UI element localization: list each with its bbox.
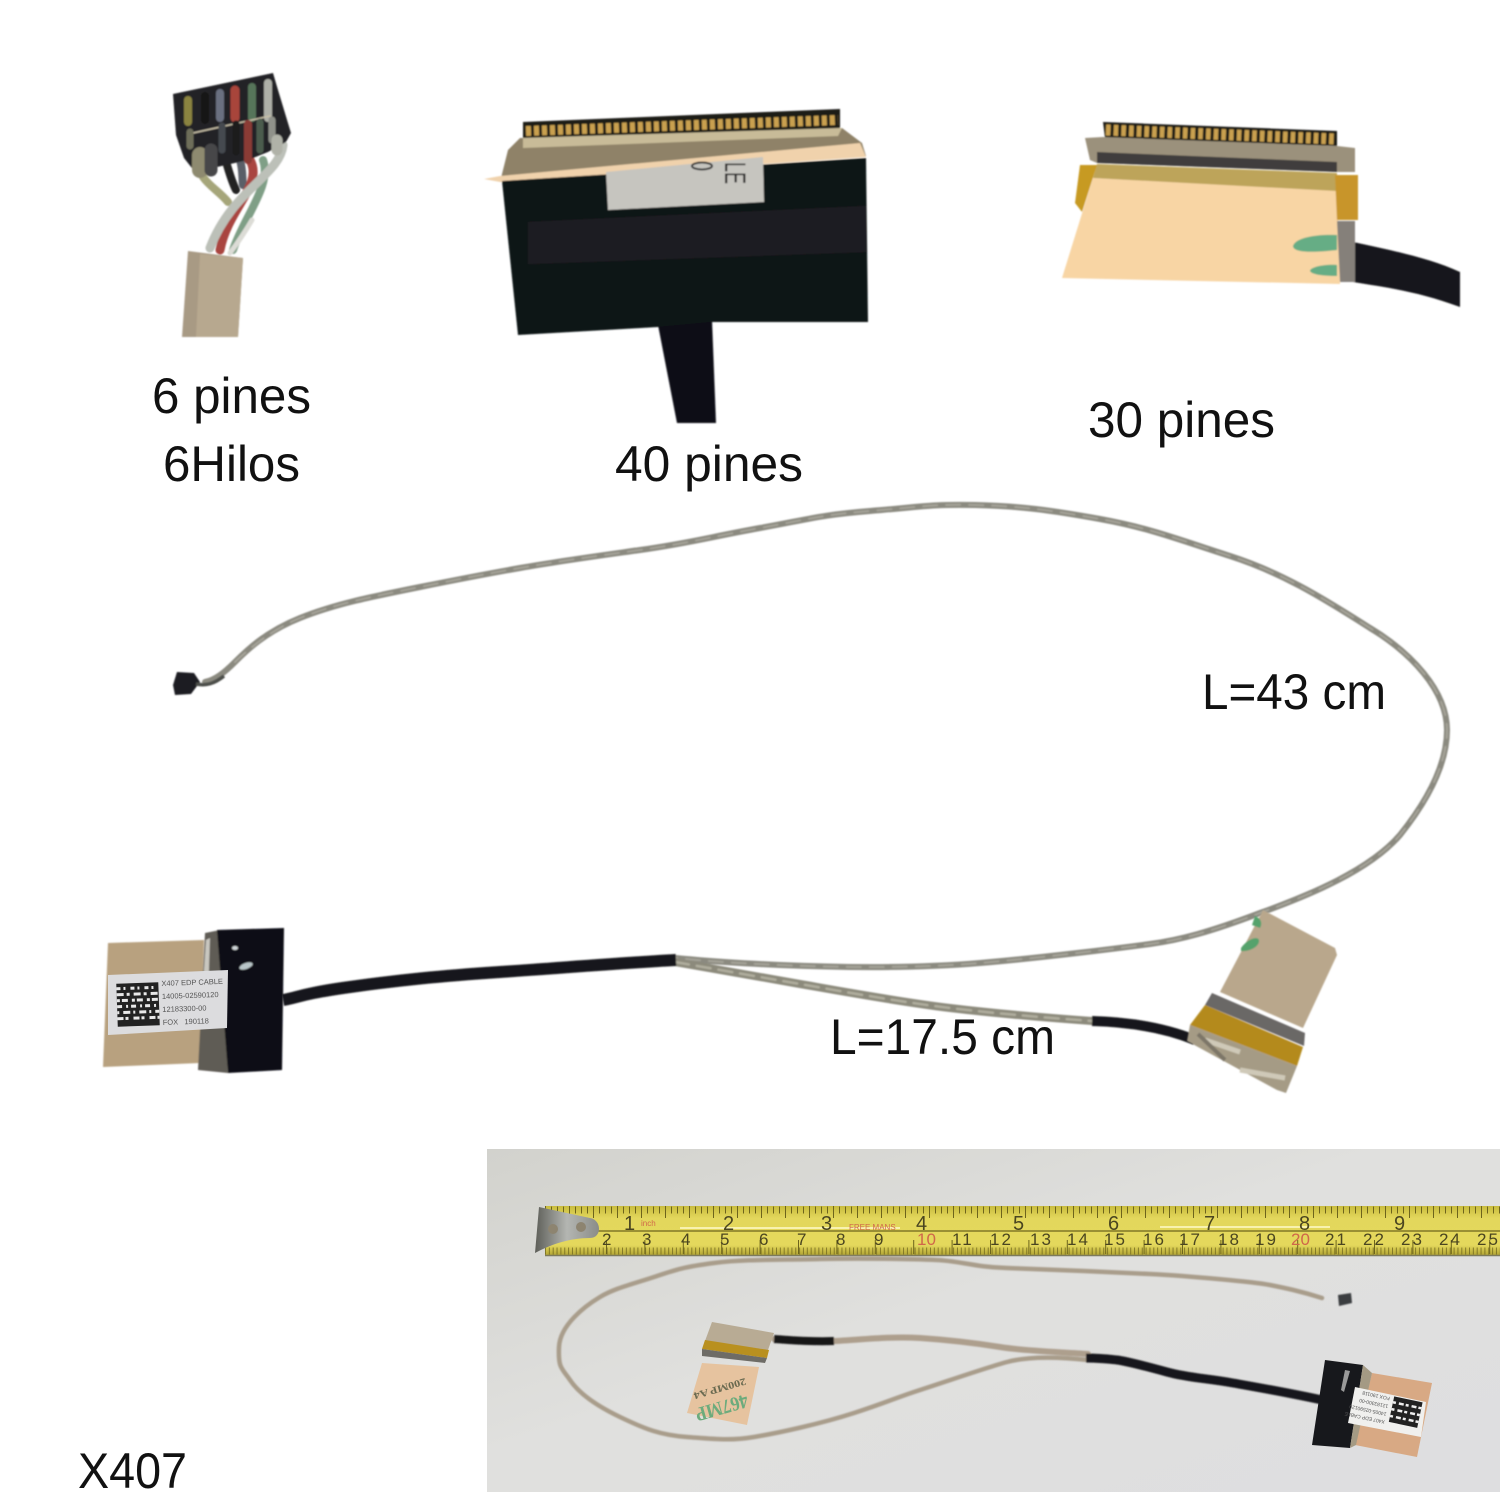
centimetre numbers: 15 bbox=[1104, 1230, 1127, 1249]
right connector bbox=[1187, 910, 1337, 1093]
centimetre numbers: 8 bbox=[836, 1230, 845, 1249]
photo background bbox=[487, 1149, 1500, 1492]
braided sleeve bbox=[182, 251, 243, 337]
photo: 30-pin connector bbox=[1062, 122, 1460, 307]
black cable bbox=[1353, 242, 1460, 307]
mesh bbox=[1337, 221, 1355, 282]
label: 30 pines: 30 pines bbox=[1088, 392, 1275, 448]
centimetre numbers bbox=[602, 1230, 1500, 1249]
tiny connector on tape photo bbox=[1338, 1293, 1352, 1306]
sticker text: 14005-02590120 bbox=[162, 990, 219, 1001]
centimetre numbers: 4 bbox=[681, 1230, 690, 1249]
model label: X407: X407 bbox=[78, 1443, 187, 1499]
white sticker bbox=[606, 157, 764, 210]
centimetre numbers: 21 bbox=[1325, 1230, 1348, 1249]
centimetre numbers: 19 bbox=[1255, 1230, 1278, 1249]
centimetre numbers: 25 bbox=[1477, 1230, 1500, 1249]
QR code bbox=[1389, 1396, 1423, 1428]
pin strip bbox=[523, 109, 840, 139]
metal shell bbox=[1085, 137, 1355, 172]
inch numbers: 2 bbox=[723, 1213, 734, 1235]
pins bbox=[1103, 122, 1337, 146]
inch numbers: 8 bbox=[1299, 1213, 1310, 1235]
centimetre numbers: 23 bbox=[1401, 1230, 1424, 1249]
centimetre numbers: 22 bbox=[1363, 1230, 1386, 1249]
inch numbers: 1 bbox=[624, 1213, 635, 1235]
long cable bbox=[205, 505, 1447, 1040]
centimetre numbers: 5 bbox=[720, 1230, 729, 1249]
tape brand name: FREE MANS bbox=[849, 1223, 896, 1232]
centimetre numbers: 2 bbox=[602, 1230, 611, 1249]
centimetre numbers: 16 bbox=[1143, 1230, 1166, 1249]
photo: cable with measuring tape bbox=[487, 1149, 1500, 1492]
black branch end bbox=[1092, 1021, 1195, 1040]
full cable diagram bbox=[103, 505, 1447, 1093]
gold sides bbox=[1075, 165, 1097, 212]
inch numbers: 3 bbox=[821, 1213, 832, 1235]
left connector with tab bbox=[687, 1322, 774, 1425]
twisted wires bbox=[203, 145, 283, 253]
sticker text: 12183300-00 bbox=[162, 1003, 207, 1014]
centimetre numbers: 7 bbox=[797, 1230, 806, 1249]
metal hook bbox=[535, 1207, 599, 1253]
centimetre numbers: 13 bbox=[1030, 1230, 1053, 1249]
metal shell bbox=[500, 128, 866, 182]
photo: 6-pin connector bbox=[173, 73, 291, 337]
centimetre numbers: 9 bbox=[874, 1230, 883, 1249]
label: L=17.5 cm: L=17.5 cm bbox=[830, 1009, 1055, 1065]
sticker text upside-down: 12183300-00 bbox=[1359, 1397, 1389, 1409]
inch numbers bbox=[624, 1213, 1405, 1235]
label: L=43 cm: L=43 cm bbox=[1202, 664, 1386, 720]
green marks bbox=[1293, 235, 1337, 252]
centimetre numbers: 14 bbox=[1067, 1230, 1090, 1249]
black cable stem bbox=[658, 320, 716, 423]
short branch bbox=[675, 962, 1092, 1021]
inch numbers: 7 bbox=[1204, 1213, 1215, 1235]
cable loop bbox=[559, 1259, 1322, 1439]
sticker text upside-down: X407 EDP CABLE bbox=[1343, 1410, 1386, 1424]
peach tab bbox=[1062, 178, 1340, 284]
tiny 6-pin end bbox=[173, 672, 224, 695]
centimetre numbers: 20 bbox=[1291, 1230, 1310, 1249]
centimetre numbers: 18 bbox=[1218, 1230, 1241, 1249]
black trunk bbox=[283, 960, 676, 1000]
black sleeves bbox=[774, 1339, 834, 1341]
inch numbers: 4 bbox=[916, 1213, 927, 1235]
tan tape strip bbox=[484, 143, 866, 182]
tab text 467MP: 467MP bbox=[693, 1389, 751, 1425]
centimetre numbers: 6 bbox=[759, 1230, 768, 1249]
centimetre numbers: 17 bbox=[1179, 1230, 1202, 1249]
connector housing bbox=[173, 73, 291, 172]
gold strip bbox=[1093, 164, 1337, 191]
label: 6 pines: 6 pines bbox=[152, 368, 311, 424]
sticker text upside-down bbox=[1343, 1386, 1391, 1424]
sticker text: LE bbox=[718, 162, 751, 184]
sticker text: FOX 190118 bbox=[163, 1016, 209, 1027]
right connector with label bbox=[1312, 1360, 1432, 1457]
centimetre numbers: 10 bbox=[917, 1230, 936, 1249]
black tape body bbox=[502, 158, 868, 335]
inch numbers: 5 bbox=[1013, 1213, 1024, 1235]
sticker text fragment bbox=[692, 162, 712, 170]
sticker text upside-down: 14005-02590120 bbox=[1349, 1403, 1387, 1417]
tape brand text: inch bbox=[641, 1219, 656, 1228]
pin cavities bbox=[188, 83, 277, 170]
QR code bbox=[116, 982, 160, 1027]
centimetre numbers: 12 bbox=[990, 1230, 1013, 1249]
centimetre numbers: 24 bbox=[1439, 1230, 1462, 1249]
inch numbers: 6 bbox=[1108, 1213, 1119, 1235]
centimetre numbers: 11 bbox=[952, 1230, 974, 1249]
sticker text bbox=[161, 977, 224, 1027]
centimetre numbers: 3 bbox=[642, 1230, 651, 1249]
sticker text: X407 EDP CABLE bbox=[161, 977, 223, 988]
inch numbers: 9 bbox=[1394, 1213, 1405, 1235]
label sticker bbox=[108, 970, 228, 1035]
label: 40 pines: 40 pines bbox=[615, 436, 803, 492]
label: 6Hilos: 6Hilos bbox=[163, 436, 300, 492]
sticker text upside-down: FOX 190118 bbox=[1362, 1389, 1391, 1401]
tab text 200MP: 200MP A4 bbox=[692, 1375, 747, 1401]
photo: 40-pin connector bbox=[484, 109, 868, 423]
left connector bbox=[103, 928, 284, 1073]
tape measure bbox=[535, 1206, 1500, 1256]
